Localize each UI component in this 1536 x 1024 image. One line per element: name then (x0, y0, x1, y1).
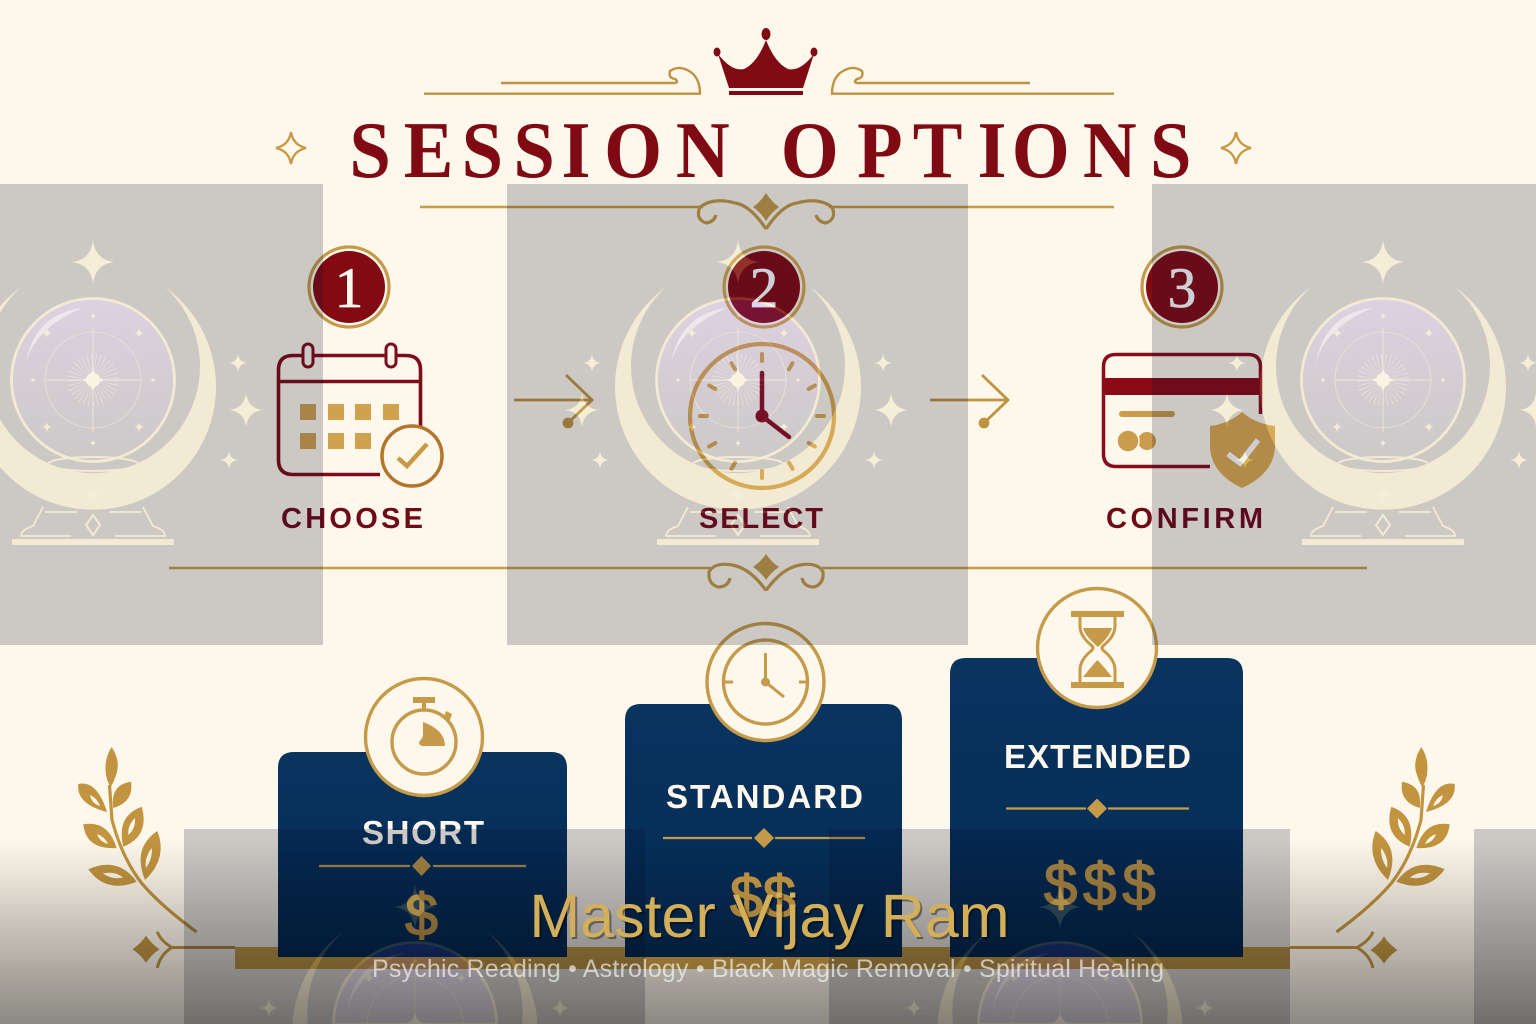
price: $$: $$ (730, 864, 796, 930)
icon: stopwatch (366, 678, 482, 796)
badge 3 (1142, 247, 1222, 327)
badge 1: 1 (335, 257, 363, 320)
card: standard (625, 624, 902, 957)
icon: sparkle left (276, 132, 306, 164)
laurel right (1336, 747, 1455, 932)
icon: calendar (278, 344, 442, 486)
price: $: $ (405, 882, 438, 948)
badge 1 (309, 247, 389, 327)
icon: clock (690, 344, 834, 488)
label: extended: EXTENDED (1004, 738, 1191, 775)
icon: credit card with shield (1102, 354, 1275, 488)
card: short (278, 678, 567, 957)
arrow: step 1 to 2 (514, 375, 593, 427)
icon: clock (707, 624, 824, 740)
label: select: SELECT (699, 503, 823, 535)
badge 2 (724, 247, 804, 327)
crown flourish left (424, 68, 700, 94)
arrow: step 2 to 3 (930, 375, 1009, 427)
title: SESSION OPTIONS (349, 105, 1191, 195)
crown ornament (424, 28, 1114, 95)
label: confirm: CONFIRM (1106, 503, 1263, 535)
bottom fade overlay (0, 840, 1536, 1024)
laurel left (78, 747, 196, 932)
label: short: SHORT (362, 814, 484, 851)
icon: sparkle right (1221, 132, 1251, 164)
divider (663, 828, 865, 848)
label: standard: STANDARD (666, 778, 863, 815)
title divider (420, 193, 1114, 229)
divider (319, 856, 526, 876)
step 3: confirm (1102, 247, 1275, 535)
badge 2: 2 (750, 257, 778, 320)
card: extended (950, 588, 1243, 957)
step 1: choose (278, 247, 442, 535)
divider (1006, 798, 1189, 818)
step 2: select (690, 247, 834, 535)
footer services: Psychic Reading • Astrology • Black Magic Removal • Spiritual Healing (372, 955, 1164, 983)
podium base with flourishes (132, 932, 1398, 969)
label: choose: CHOOSE (281, 503, 423, 535)
icon: hourglass (1038, 588, 1156, 708)
section divider (169, 554, 1367, 590)
price: $$$: $$$ (1044, 851, 1162, 918)
badge 3: 3 (1168, 257, 1196, 320)
footer name: Master Vijay Ram (529, 882, 1010, 950)
footer name: Master Vijay Ram (531, 884, 1012, 952)
icon: crown (714, 28, 818, 95)
crown flourish right (832, 68, 1114, 94)
